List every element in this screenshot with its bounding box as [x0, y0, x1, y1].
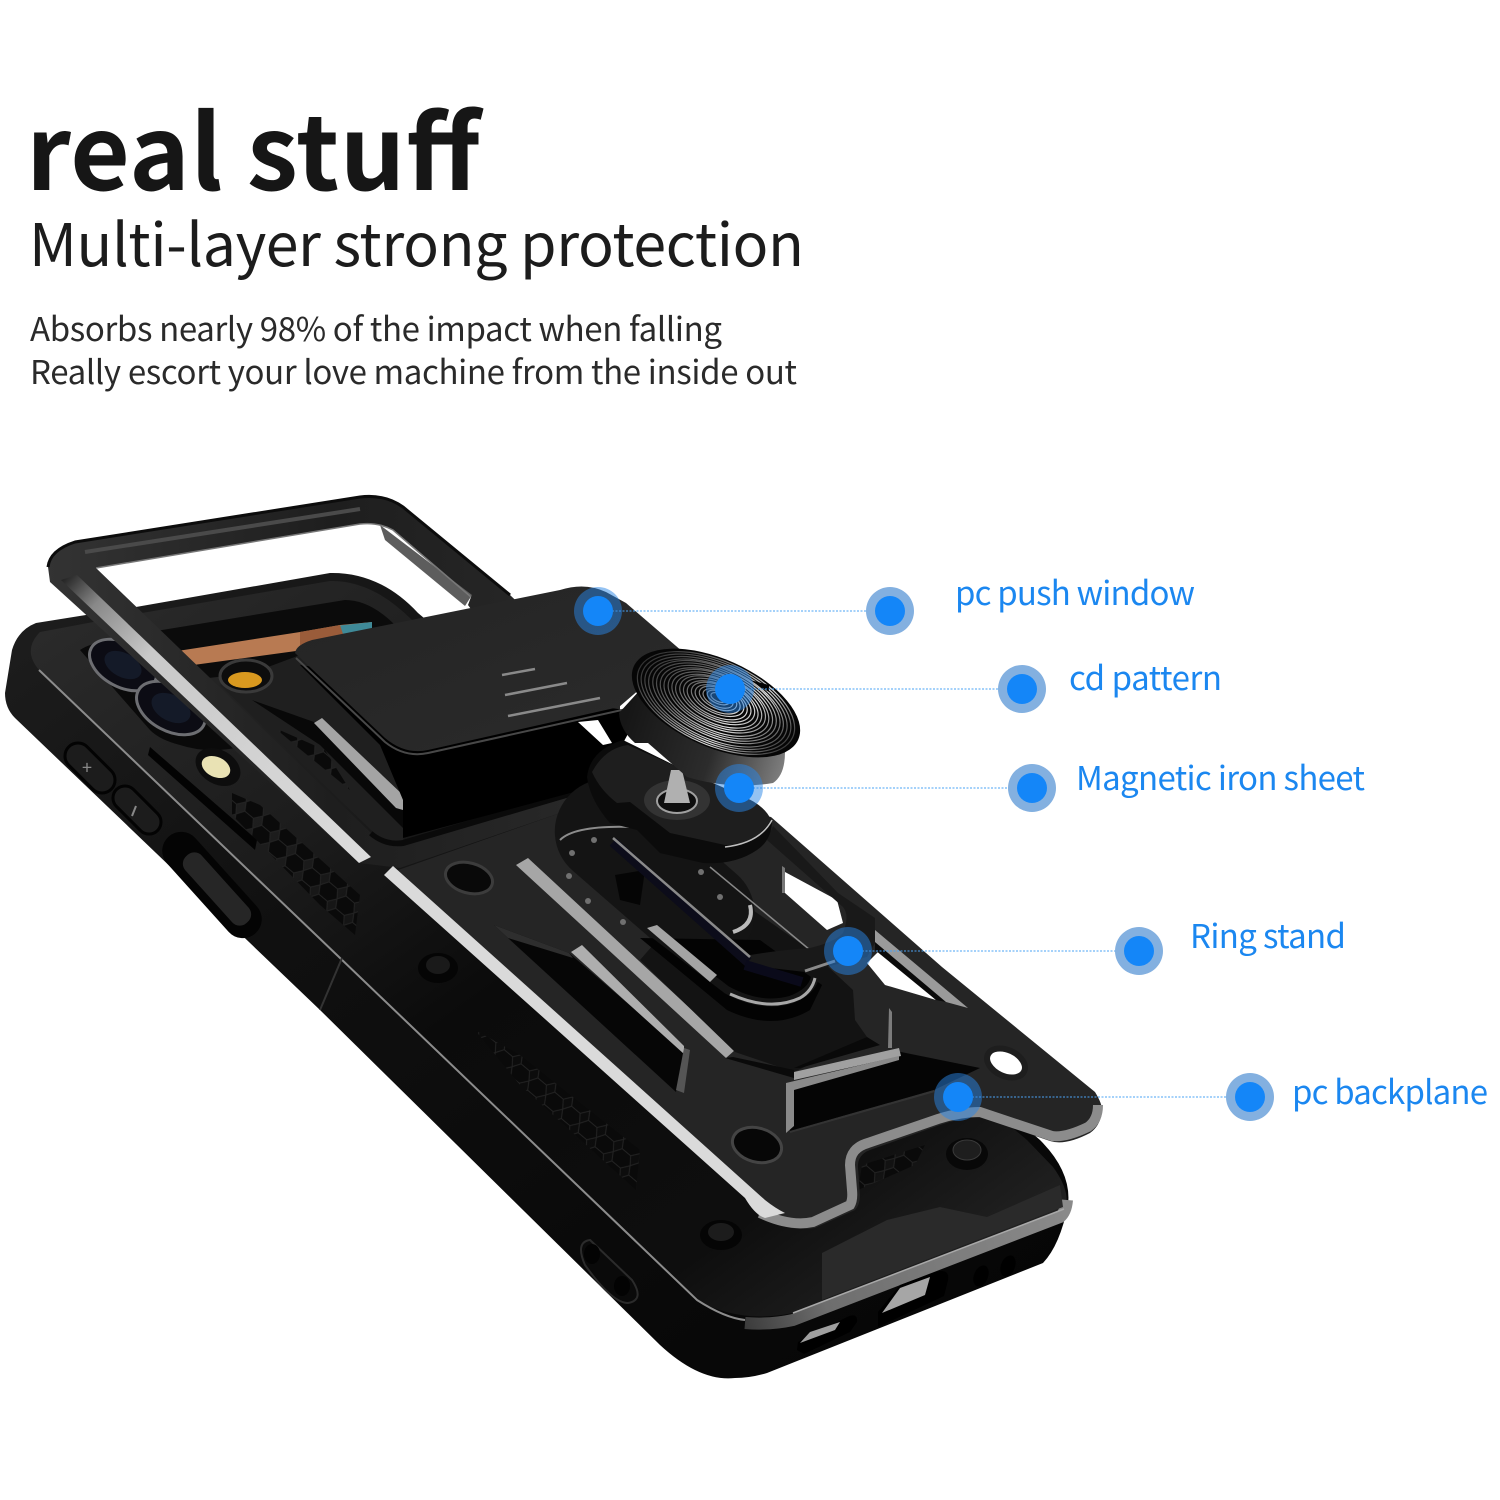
icon: microphone holes [581, 1240, 638, 1303]
cd pattern magnet disc [616, 626, 816, 785]
pc backplane [384, 790, 1102, 1229]
pc push window slider [295, 586, 683, 754]
backplane screw holes [442, 857, 1030, 1168]
ring stand [533, 757, 875, 1021]
speaker slit [148, 747, 257, 850]
white gap behind slider [578, 720, 612, 745]
backplane raised ribs [494, 858, 735, 1093]
exploded phone case illustration [5, 496, 1102, 1378]
icon: screw left [418, 953, 458, 983]
backplane cutout [782, 866, 968, 1008]
inner slide plate with camera hole [220, 655, 420, 841]
callout: cd pattern: cd pattern [1069, 652, 1222, 700]
callout: pc backplane [934, 1066, 1488, 1121]
description text: Really escort your love machine from the inside out [30, 346, 797, 394]
callout: ring stand: Ring stand [1190, 910, 1346, 958]
icon: screw bottom [700, 1220, 742, 1250]
cover screen with photo [150, 600, 395, 680]
icon: side buttons [60, 738, 270, 946]
icon: camera flash [189, 740, 247, 794]
icon: side buttons: + [82, 754, 92, 780]
phone body [5, 573, 1068, 1378]
callout: pc backplane: pc backplane [1292, 1066, 1488, 1114]
callout: magnetic iron sheet [715, 752, 1365, 812]
icon: screw right [946, 1138, 988, 1170]
callout: magnetic iron sheet: Magnetic iron sheet [1076, 752, 1365, 800]
icon: camera lenses [80, 629, 250, 750]
callout: cd pattern [706, 652, 1222, 713]
title: real stuff [26, 71, 484, 220]
icon: bottom ports [800, 1274, 930, 1343]
callout: ring stand [824, 910, 1346, 975]
subtitle: Multi-layer strong protection [29, 198, 804, 283]
grip strips with hex pattern [232, 793, 925, 1190]
black slider block [300, 665, 640, 838]
description text [30, 303, 797, 394]
callout: pc push window [574, 567, 1195, 635]
backplane recess [640, 880, 980, 1133]
magnetic iron sheet and stem [587, 740, 772, 863]
description text: Absorbs nearly 98% of the impact when falling [30, 303, 722, 351]
callout: pc push window: pc push window [955, 567, 1195, 615]
metal frame [48, 496, 620, 868]
